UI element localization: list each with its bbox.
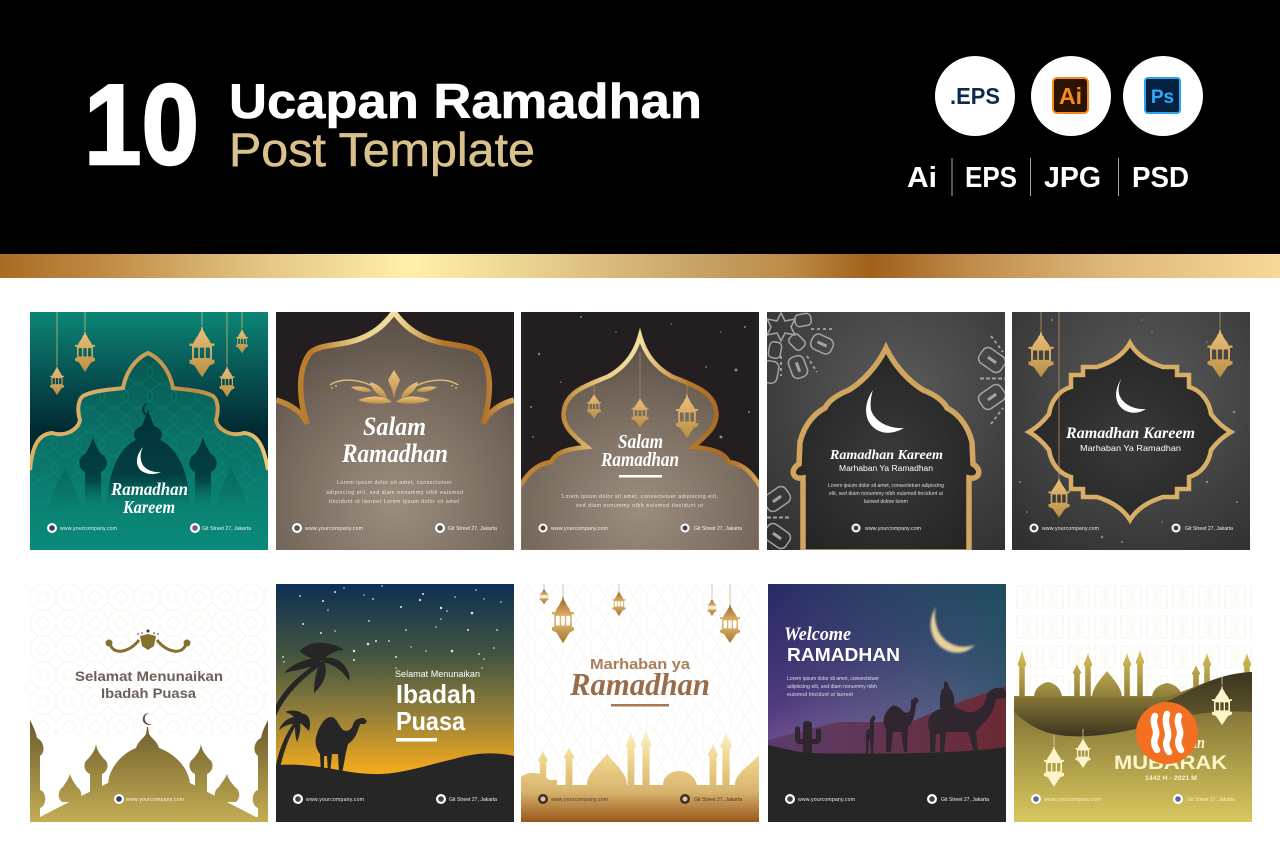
headline: Ramadhan Kareem bbox=[1065, 425, 1195, 442]
footer contacts: Git Street 27, Jakarta bbox=[1187, 797, 1235, 803]
headline: Puasa bbox=[396, 706, 465, 736]
skyline bbox=[1014, 584, 1252, 714]
headline bbox=[111, 482, 188, 513]
footer contacts: Git Street 27, Jakarta bbox=[202, 526, 251, 532]
footer contacts: www.yourcompany.com bbox=[551, 797, 608, 803]
ornament bbox=[330, 370, 458, 404]
bold heading: RAMADHAN bbox=[787, 645, 900, 665]
body text: Lorem ipsum dolor sit amet, consectetuer bbox=[337, 480, 452, 486]
icon: Illustrator badge: Ai bbox=[1059, 83, 1082, 109]
arch frame bbox=[30, 356, 268, 510]
hanging lanterns bbox=[50, 312, 248, 397]
camel caravan bbox=[866, 682, 1008, 754]
footer contact bbox=[114, 794, 184, 804]
stars bbox=[282, 585, 502, 669]
body text: elit, sed diam nonummy nibh euismod tincidunt ut bbox=[829, 491, 944, 497]
bottom fade bbox=[32, 488, 268, 526]
small crescent bbox=[142, 403, 152, 416]
ornament bbox=[106, 630, 190, 651]
footer contacts bbox=[47, 523, 251, 533]
footer contacts: www.yourcompany.com bbox=[1042, 526, 1099, 532]
headline: Ibadah bbox=[396, 679, 476, 709]
mosque silhouette bbox=[79, 410, 217, 502]
footer contact: www.yourcompany.com bbox=[865, 526, 921, 532]
number 10: 10 bbox=[84, 62, 199, 189]
footer contacts bbox=[538, 794, 742, 804]
camel bbox=[316, 717, 367, 774]
stars bbox=[530, 316, 750, 438]
dune bbox=[276, 753, 514, 822]
gold gradient band bbox=[0, 254, 1280, 278]
heading: Marhaban ya bbox=[590, 657, 691, 673]
arch frame bbox=[793, 348, 979, 552]
footer contact bbox=[852, 524, 921, 532]
far dunes bbox=[768, 686, 1006, 754]
footer contacts: Git Street 27, Jakarta bbox=[448, 526, 497, 532]
headline: Ramadhan bbox=[110, 479, 188, 499]
body text: Lorem ipsum dolor sit amet, consectetuer adipiscing bbox=[828, 483, 944, 489]
footer contacts bbox=[293, 794, 497, 804]
subtitle: Post Template: Post Template bbox=[229, 123, 535, 176]
lower gold field bbox=[1014, 697, 1252, 822]
headline bbox=[601, 434, 678, 466]
cream lanterns bbox=[1044, 674, 1232, 787]
subheading: Marhaban Ya Ramadhan bbox=[1080, 443, 1181, 453]
icon: Photoshop badge: Ps bbox=[1151, 87, 1174, 108]
footer contacts bbox=[292, 523, 497, 533]
ornate frame bbox=[1029, 343, 1231, 520]
footer contacts: Git Street 27, Jakarta bbox=[694, 526, 742, 532]
panel 1: Ramadhan Kareem teal bbox=[30, 312, 268, 550]
body text bbox=[828, 483, 944, 505]
footer contacts: Git Street 27, Jakarta bbox=[694, 797, 742, 803]
header panel bbox=[0, 0, 1280, 254]
skyline bbox=[521, 584, 759, 822]
script heading: Ramadhan bbox=[1139, 733, 1205, 752]
arch frame bbox=[276, 312, 514, 550]
body text: Lorem ipsum dolor sit amet, consectetuer bbox=[787, 676, 879, 682]
footer contacts: www.yourcompany.com bbox=[798, 797, 855, 803]
footer contacts: Git Street 27, Jakarta bbox=[941, 797, 989, 803]
small crescent bbox=[143, 713, 152, 725]
crescent moon bbox=[1116, 378, 1146, 413]
headline bbox=[342, 416, 447, 462]
headline: Selamat Menunaikan bbox=[75, 669, 223, 684]
format labels: PSD bbox=[1132, 162, 1189, 194]
lanterns bbox=[1028, 312, 1232, 518]
footer contacts bbox=[785, 794, 989, 804]
footer contacts: Git Street 27, Jakarta bbox=[449, 797, 497, 803]
icon: EPS badge bbox=[935, 56, 1015, 136]
format labels: JPG bbox=[1044, 162, 1101, 194]
body text: euismod tincidunt ut laoreet bbox=[787, 692, 854, 698]
body text bbox=[787, 676, 879, 698]
white crescent bbox=[137, 447, 161, 474]
footer contacts bbox=[1030, 524, 1233, 532]
footer contacts: www.yourcompany.com bbox=[1044, 797, 1101, 803]
body text bbox=[326, 480, 463, 505]
footer contacts: www.yourcompany.com bbox=[305, 526, 363, 532]
dark wave bbox=[1014, 672, 1252, 736]
format labels: EPS bbox=[965, 162, 1017, 194]
foreground dune bbox=[768, 745, 1006, 822]
panel 8: Marhaban ya Ramadhan white bbox=[521, 584, 759, 822]
divider bar bbox=[396, 738, 437, 742]
panel 9: Welcome Ramadhan purple desert bbox=[768, 584, 1008, 822]
headline: Ramadhan Kareem bbox=[829, 448, 943, 463]
panel 10: Mubarak gold skyline bbox=[1014, 584, 1252, 822]
title: Ucapan Ramadhan: Ucapan Ramadhan bbox=[229, 75, 702, 129]
icon: Illustrator badge bbox=[1031, 56, 1111, 136]
panel 3: Salam Ramadhan domed arch bbox=[519, 312, 761, 552]
short palm bbox=[276, 711, 310, 772]
body text: Lorem ipsum dolor sit amet, consectetuer adipiscing elit, bbox=[562, 494, 718, 500]
headline bbox=[395, 669, 480, 736]
footer contacts: Git Street 27, Jakarta bbox=[1185, 526, 1233, 532]
body text: sed diam nonummy nibh euismod tincidunt ut bbox=[576, 503, 704, 509]
panel 6: Selamat Menunaikan white mosque bbox=[30, 584, 268, 822]
panel 2: Salam Ramadhan brown arch bbox=[276, 312, 514, 550]
footer contacts bbox=[1031, 794, 1235, 804]
panel 4: Ramadhan Kareem gray arch bbox=[760, 312, 1008, 552]
format labels bbox=[907, 158, 1189, 196]
headline: Selamat Menunaikan bbox=[395, 669, 480, 680]
footer contacts: www.yourcompany.com bbox=[60, 526, 117, 532]
format labels: Ai bbox=[907, 162, 937, 194]
divider bar bbox=[611, 704, 669, 706]
panel 5: Ramadhan Kareem ornate frame bbox=[1012, 312, 1250, 550]
hanging lanterns bbox=[540, 584, 740, 643]
panel 7: Ibadah Puasa desert night bbox=[276, 584, 514, 822]
headline: Salam bbox=[618, 431, 663, 453]
heading: Welcome bbox=[784, 624, 852, 645]
mandala decorations bbox=[760, 313, 1008, 551]
orange logo badge bbox=[1136, 702, 1198, 764]
body text: tincidunt ut laoreet Lorem ipsum dolor sit amet bbox=[329, 499, 460, 505]
subheading: Marhaban Ya Ramadhan bbox=[839, 464, 933, 473]
headline: Ramadhan bbox=[341, 439, 448, 468]
body text: adipiscing elit, sed diam nonummy nibh bbox=[787, 684, 877, 690]
footer contacts: www.yourcompany.com bbox=[306, 797, 364, 803]
divider bar bbox=[619, 475, 662, 478]
footer contact: www.yourcompany.com bbox=[126, 797, 184, 803]
headline bbox=[75, 669, 223, 701]
footer contacts bbox=[538, 524, 742, 532]
tall palm bbox=[276, 643, 349, 716]
headline: Ramadhan bbox=[600, 449, 679, 471]
headline: Ibadah Puasa bbox=[101, 686, 197, 701]
cactus bbox=[795, 721, 821, 754]
script heading: Ramadhan bbox=[569, 666, 710, 702]
lanterns bbox=[587, 352, 698, 438]
bold heading: MUBARAK bbox=[1114, 753, 1227, 774]
body text: laoreet dolore lorem bbox=[864, 499, 908, 505]
headline: Kareem bbox=[122, 497, 175, 517]
icon: Photoshop badge bbox=[1123, 56, 1203, 136]
mosque silhouette bbox=[30, 720, 268, 822]
year line: 1442 H - 2021 M bbox=[1145, 775, 1197, 782]
body text bbox=[562, 494, 718, 509]
crescent moon bbox=[931, 607, 975, 653]
crescent moon bbox=[866, 390, 904, 433]
stars bbox=[1019, 319, 1238, 543]
body text: adipiscing elit, sed diam nonummy nibh euismod bbox=[326, 490, 463, 496]
footer contacts: www.yourcompany.com bbox=[551, 526, 608, 532]
arch frame bbox=[519, 336, 761, 552]
headline: Salam bbox=[363, 412, 426, 441]
icon: EPS badge: .EPS bbox=[950, 83, 1000, 109]
